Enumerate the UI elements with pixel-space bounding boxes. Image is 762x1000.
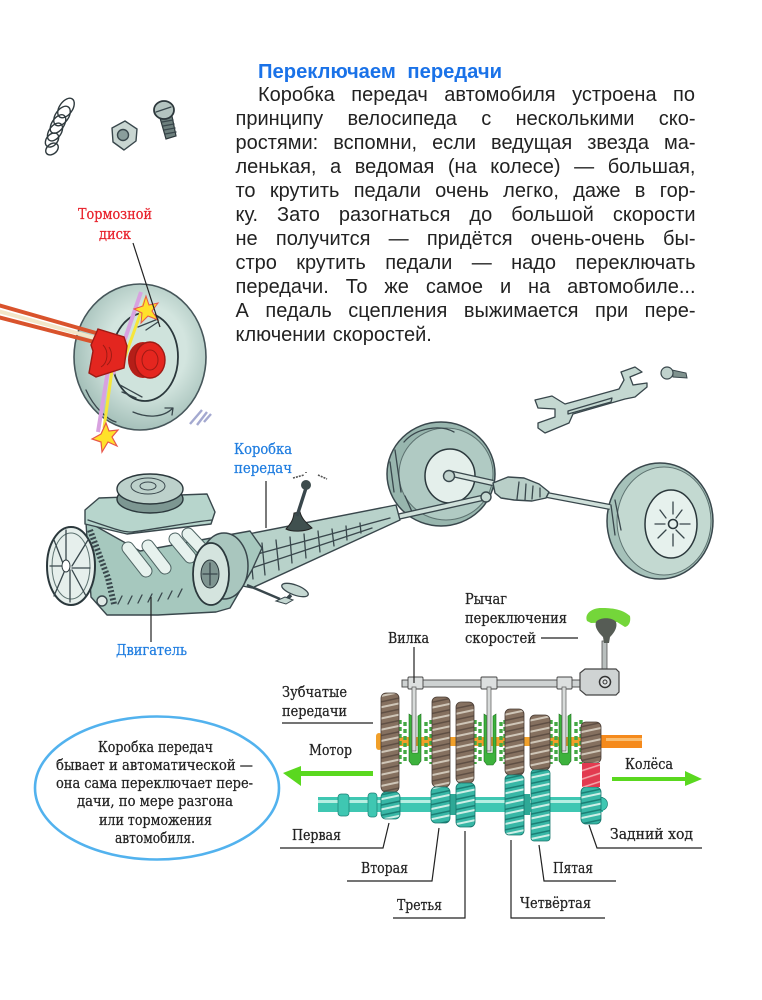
text block: main paragraph: ку. Зато разогнаться до большой скорости <box>236 204 696 226</box>
engine fins <box>128 534 203 571</box>
text block: main paragraph: то крутить педали очень легко, даже в гор- <box>236 180 696 202</box>
callout: или торможения <box>99 813 212 829</box>
label: fourth gear: Четвёртая <box>520 896 591 912</box>
text block: main paragraph <box>236 84 696 346</box>
callout: автомобиля. <box>115 831 195 847</box>
label: fork <box>388 631 429 683</box>
wheel disc <box>74 284 206 430</box>
belt <box>90 530 114 604</box>
label: second gear <box>347 828 439 881</box>
label: brake disc: диск <box>99 227 131 243</box>
axle shaft <box>547 495 610 507</box>
title: Переключаем передачи <box>258 61 502 83</box>
gear stick <box>286 512 312 531</box>
text block: main paragraph: А педаль сцепления выжимается при пере- <box>236 300 696 322</box>
label: engine <box>116 597 187 659</box>
motion strokes <box>190 410 211 425</box>
label: brake disc: Тормозной <box>78 207 152 223</box>
icon: nut <box>112 121 137 150</box>
panel: engine and gearbox <box>47 472 400 615</box>
label: reverse gear <box>589 825 702 848</box>
label: shift lever <box>465 592 578 647</box>
brake disc inner ring <box>112 313 178 401</box>
callout: дачи, по мере разгона <box>77 794 233 810</box>
text block: main paragraph: ленькая, а ведомая (на колесе) — большая, <box>236 156 696 178</box>
reverse idler gear <box>582 763 600 787</box>
text block: main paragraph: стро крутить педали — надо переключать <box>236 252 696 274</box>
callout: Коробка передач <box>98 740 213 756</box>
label: fifth gear: Пятая <box>553 861 593 877</box>
label: engine: Двигатель <box>116 643 187 659</box>
icon: spring <box>43 95 78 157</box>
label: shift lever: Рычаг <box>465 592 507 608</box>
flywheel <box>47 527 95 605</box>
direction arrows <box>293 472 327 479</box>
text block: main paragraph: не получится — придётся очень-очень бы- <box>236 228 696 250</box>
transmission joint <box>444 470 549 501</box>
label: first gear <box>280 823 389 848</box>
label: fifth gear <box>539 845 616 881</box>
label: fork: Вилка <box>388 631 429 647</box>
arrow: wheels <box>612 771 702 786</box>
label: gearbox <box>234 442 292 528</box>
gearbox housing <box>233 505 400 588</box>
label: third gear: Третья <box>397 898 442 914</box>
panel: brake disc <box>0 284 211 452</box>
label: wheels: Колёса <box>625 757 673 773</box>
upper orange shaft <box>376 733 642 750</box>
icon: wrench <box>535 367 647 433</box>
label: toothed gears <box>282 685 373 723</box>
text block: main paragraph: принципу велосипеда с несколькими ско- <box>236 108 696 130</box>
selector rail <box>402 669 619 695</box>
shift lever <box>586 608 630 670</box>
cylinder head cover <box>85 494 215 534</box>
label: gearbox: передач <box>234 461 292 477</box>
right rear wheel <box>607 463 713 579</box>
label: toothed gears: передачи <box>282 704 347 720</box>
sparks lower <box>98 370 108 432</box>
label: toothed gears: Зубчатые <box>282 685 347 701</box>
label: second gear: Вторая <box>361 861 408 877</box>
label: third gear <box>393 831 465 918</box>
left rear wheel <box>387 422 495 526</box>
synchronizers and forks <box>400 687 581 765</box>
label: first gear: Первая <box>292 828 341 844</box>
text block: main paragraph: ростями: вспомни, если ведущая звезда ма- <box>236 132 696 154</box>
label: gearbox: Коробка <box>234 442 292 458</box>
air filter <box>117 485 183 513</box>
arrow: motor <box>283 766 373 786</box>
rod <box>0 305 96 333</box>
callout <box>35 716 279 860</box>
panel: gearbox diagram <box>280 592 702 918</box>
label: reverse gear: Задний ход <box>610 827 693 843</box>
star top <box>134 296 158 323</box>
label: shift lever: переключения <box>465 611 567 627</box>
text block: main paragraph: ключении скоростей. <box>236 324 432 346</box>
sparks upper <box>113 292 141 374</box>
label: fourth gear <box>511 840 605 918</box>
icon: small bolt <box>661 367 687 379</box>
hub <box>128 342 158 378</box>
pedal <box>247 585 280 599</box>
lower teal shaft <box>318 793 608 817</box>
engine block <box>86 523 262 615</box>
text block: main paragraph: Коробка передач автомобиля устроена по <box>258 84 695 106</box>
callout: она сама переключает пере- <box>56 776 253 792</box>
star bottom <box>92 423 118 452</box>
caliper <box>89 329 127 377</box>
label: motor: Мотор <box>309 743 352 759</box>
text block: main paragraph: передачи. То же самое и на автомобиле... <box>236 276 696 298</box>
icon: screw <box>154 101 176 139</box>
propeller shaft <box>370 498 482 523</box>
label: shift lever: скоростей <box>465 631 536 647</box>
gears <box>381 693 601 792</box>
clutch housing <box>200 533 248 599</box>
label: brake disc <box>78 207 160 327</box>
callout: бывает и автоматической — <box>56 758 253 774</box>
